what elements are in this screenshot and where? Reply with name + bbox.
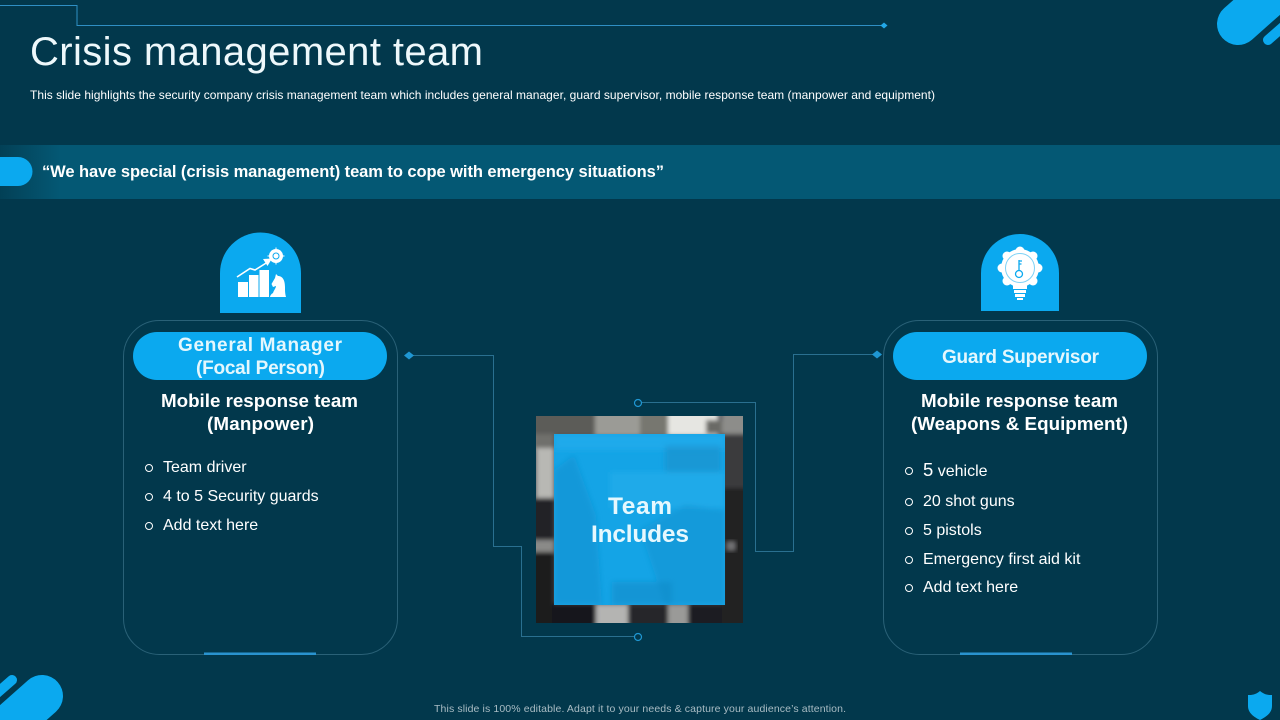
photo (536, 416, 743, 623)
team heading: Mobile response team (921, 390, 1118, 411)
role title: General Manager (178, 335, 343, 356)
quote banner (0, 145, 1280, 199)
icon: shield (1248, 691, 1272, 720)
banner pill accent (0, 157, 32, 186)
panel outline (884, 320, 1158, 654)
team heading: Mobile response team (161, 390, 358, 411)
manpower list (146, 459, 319, 534)
team heading: (Manpower) (207, 413, 314, 434)
icon: gear light bulb with key (981, 234, 1059, 311)
icon: growth chart with chess knight (220, 232, 301, 313)
role pill (133, 332, 387, 380)
role title (178, 335, 343, 379)
panel: guard supervisor (884, 320, 1158, 655)
role title: Guard Supervisor (942, 347, 1100, 368)
equipment list (906, 459, 1081, 596)
subtitle description: This slide highlights the security company crisis management team which includes general manager, guard supervisor, mobile response team (manpower and equipment) (30, 88, 935, 102)
team includes photo card (536, 416, 743, 623)
translucent blue square (554, 434, 725, 605)
blue photo tint details (554, 434, 725, 605)
panel bottom accent (960, 652, 1072, 655)
team heading (161, 390, 358, 434)
equipment list: Emergency first aid kit (923, 551, 1081, 568)
equipment list: 5 pistols (923, 522, 982, 539)
top decorative connector line (0, 6, 888, 28)
manpower list: 4 to 5 Security guards (163, 488, 319, 505)
team heading (911, 390, 1128, 434)
card label (591, 493, 689, 548)
top-right corner pill decoration (1238, 0, 1280, 40)
panel outline (124, 320, 398, 654)
card label: Team (608, 493, 672, 520)
role title: (Focal Person) (196, 358, 325, 379)
panel bottom accent (204, 652, 316, 655)
role pill (893, 332, 1147, 380)
bottom-left corner pill decoration (0, 680, 42, 720)
left connector (404, 352, 642, 640)
manpower list: Add text here (163, 517, 258, 534)
equipment list: 20 shot guns (923, 493, 1015, 510)
right connector (634, 350, 882, 552)
title: Crisis management team (30, 30, 483, 74)
quote text: “We have special (crisis management) team to cope with emergency situations” (42, 163, 664, 181)
panel: general manager (124, 320, 398, 655)
team heading: (Weapons & Equipment) (911, 413, 1128, 434)
footer note: This slide is 100% editable. Adapt it to your needs & capture your audience’s attention. (434, 703, 846, 715)
manpower list: Team driver (163, 459, 247, 476)
equipment list: Add text here (923, 579, 1018, 596)
equipment list: 5 vehicle (923, 459, 988, 480)
card label: Includes (591, 521, 689, 548)
